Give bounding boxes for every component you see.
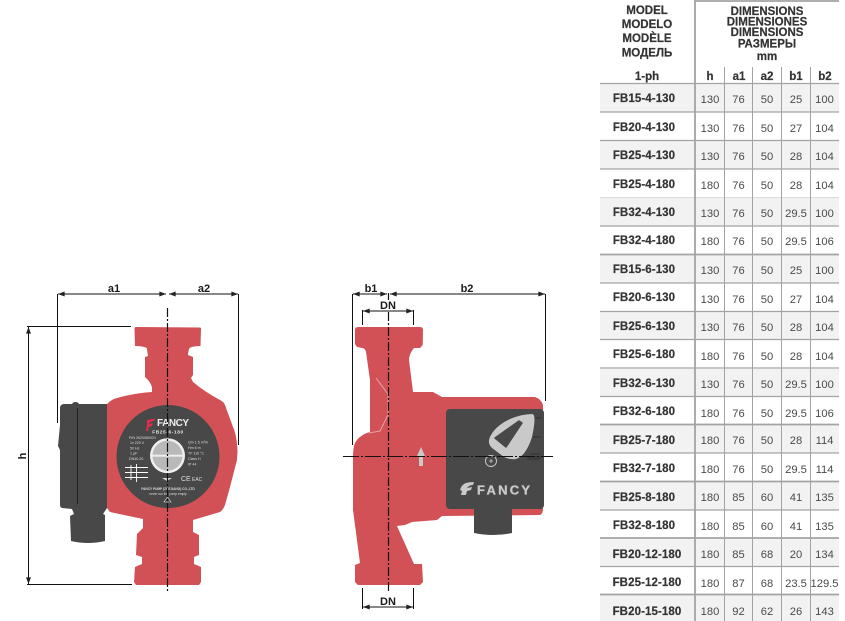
row FB32-4-130: 130 <box>701 208 719 220</box>
manufacturer text: FANCY PUMP (ZHEJIANG) CO.,LTD <box>141 487 195 491</box>
row FB32-6-180: 29.5 <box>785 408 807 420</box>
pump body side <box>353 327 543 585</box>
dimension DN top: DN <box>380 300 396 312</box>
row FB32-8-180: FB32-8-180 <box>613 520 675 532</box>
row FB32-8-180: 85 <box>732 521 745 533</box>
control label disc <box>116 405 220 508</box>
row FB20-4-130: 76 <box>732 123 745 135</box>
row FB32-4-130: 50 <box>761 208 773 220</box>
row FB20-4-130: 104 <box>815 123 834 135</box>
flow arrow <box>417 447 425 466</box>
row FB25-7-180: 114 <box>816 435 833 447</box>
dimension h: h <box>17 452 29 459</box>
row FB25-6-180: 28 <box>790 351 802 363</box>
front view pump <box>58 327 238 585</box>
row shading <box>600 84 839 621</box>
row FB32-4-180: FB32-4-180 <box>613 235 675 247</box>
row FB15-6-130: 76 <box>732 265 745 277</box>
row FB25-12-180: FB25-12-180 <box>613 577 681 589</box>
row FB25-4-180: 180 <box>701 180 719 192</box>
row FB25-4-180: 104 <box>815 180 834 192</box>
column headers: h <box>706 71 714 83</box>
grid lines <box>600 0 839 621</box>
row FB25-6-130: FB25-6-130 <box>613 321 675 333</box>
row FB20-4-130: 130 <box>701 123 719 135</box>
model header <box>622 5 672 83</box>
row FB25-4-180: 76 <box>732 180 745 192</box>
row FB15-6-130: FB15-6-130 <box>613 264 675 276</box>
flow mark <box>162 478 172 481</box>
column headers: b2 <box>818 71 832 83</box>
row FB32-4-180: 29.5 <box>785 236 807 248</box>
dimension h <box>17 326 132 584</box>
row FB25-12-180: 180 <box>701 578 719 590</box>
row FB32-7-180: FB32-7-180 <box>613 463 675 475</box>
recycle mark <box>164 497 171 502</box>
right specs <box>188 440 208 466</box>
row FB25-4-130: 76 <box>732 151 745 163</box>
row FB32-8-180: 60 <box>761 521 773 533</box>
row FB32-4-180: 76 <box>732 236 745 248</box>
row FB25-7-180: 180 <box>701 435 719 447</box>
dimension DN top <box>362 300 414 325</box>
dimension DN bottom: DN <box>380 596 396 608</box>
row FB25-8-180: 180 <box>701 492 719 504</box>
right specs: Class H <box>188 457 201 461</box>
row FB15-6-130: 130 <box>701 265 719 277</box>
certification marks: CE <box>181 476 191 483</box>
row FB15-4-130: 25 <box>790 94 802 106</box>
row FB20-6-130: 27 <box>790 294 802 306</box>
row FB32-8-180: 135 <box>815 521 834 533</box>
row FB25-7-180 <box>613 435 833 447</box>
dimensions header: DIMENSIONS <box>731 6 804 18</box>
row FB25-4-130: 104 <box>815 151 834 163</box>
wing logo <box>489 414 534 459</box>
dimension a1: a1 <box>108 283 120 295</box>
dimension a2: a2 <box>198 283 210 295</box>
rotor cap <box>150 438 185 473</box>
row FB20-6-130: 50 <box>761 294 773 306</box>
row FB25-6-180: 104 <box>815 351 834 363</box>
front view dimensions <box>17 283 238 593</box>
row FB32-6-180: 50 <box>761 408 773 420</box>
row FB32-4-180: 50 <box>761 236 773 248</box>
dimension DN bottom <box>362 588 414 609</box>
row FB20-4-130: 27 <box>790 123 802 135</box>
row FB25-12-180: 23.5 <box>785 578 807 590</box>
logo front: FANCY <box>157 418 189 429</box>
row FB25-12-180: 129.5 <box>810 578 838 590</box>
column headers: a2 <box>761 71 773 83</box>
model name: FB25-6-180 <box>152 430 184 436</box>
row FB20-4-130 <box>613 122 834 135</box>
row FB25-4-180: FB25-4-180 <box>613 179 675 191</box>
dimensions header: DIMENSIONES <box>727 16 808 28</box>
row FB20-12-180: 68 <box>761 549 773 561</box>
row FB25-6-130: 104 <box>815 322 834 334</box>
centre line vertical <box>388 293 390 593</box>
row FB15-4-130: 76 <box>732 94 745 106</box>
left specs: 50 Hz <box>130 446 140 450</box>
row FB20-15-180: 143 <box>815 606 834 618</box>
column headers <box>706 71 832 83</box>
row FB15-4-130: 50 <box>761 94 773 106</box>
row FB32-8-180: 41 <box>790 521 802 533</box>
row FB15-6-130 <box>613 264 834 277</box>
column headers: a1 <box>733 71 746 83</box>
model header: MODELO <box>622 19 672 31</box>
row FB25-12-180: 87 <box>732 578 745 590</box>
right specs: TF 110 °C <box>188 452 205 456</box>
row FB32-6-130: 76 <box>732 379 745 391</box>
centre line horizontal <box>343 456 553 458</box>
left specs: 1 µF <box>130 452 138 456</box>
row FB20-15-180 <box>613 606 834 618</box>
model header: 1-ph <box>635 71 659 83</box>
row FB25-7-180: 76 <box>732 435 745 447</box>
row FB20-6-130: 76 <box>732 294 745 306</box>
dimension b2: b2 <box>461 283 473 295</box>
row FB25-6-180: FB25-6-180 <box>613 349 675 361</box>
row FB25-4-180 <box>613 179 834 192</box>
dimensions table <box>600 0 839 621</box>
row FB20-12-180: FB20-12-180 <box>613 549 681 561</box>
row FB32-7-180: 114 <box>816 464 833 476</box>
row FB20-12-180: 134 <box>815 549 834 561</box>
row FB25-6-180: 180 <box>701 351 719 363</box>
left specs: 1x 220 V <box>130 441 145 445</box>
side view pump <box>353 327 544 585</box>
row FB25-12-180 <box>613 577 838 590</box>
row FB32-7-180 <box>613 463 833 476</box>
row FB25-8-180: 85 <box>732 492 745 504</box>
row FB20-15-180: 180 <box>701 606 719 618</box>
column headers: b1 <box>789 71 803 83</box>
row FB25-6-130: 130 <box>701 322 719 334</box>
row FB32-8-180 <box>613 520 834 533</box>
row FB20-12-180: 85 <box>732 549 745 561</box>
left specs: P/N 2620060021 <box>129 436 156 440</box>
row FB32-4-130: 29.5 <box>785 208 807 220</box>
row FB20-4-130: 50 <box>761 123 773 135</box>
row FB25-4-130: 130 <box>701 151 719 163</box>
row FB32-6-130: 50 <box>761 379 773 391</box>
row FB25-6-130 <box>613 321 834 334</box>
right specs: IP 44 <box>188 462 196 466</box>
row FB32-7-180: 180 <box>701 464 719 476</box>
row FB32-6-180 <box>613 406 834 420</box>
row FB32-7-180: 50 <box>761 464 773 476</box>
row FB32-6-130 <box>613 378 834 391</box>
row FB20-6-130: 130 <box>701 294 719 306</box>
control label disc: never run the pump empty <box>149 492 187 496</box>
row FB32-6-130: 100 <box>815 379 834 391</box>
row FB25-6-180: 76 <box>732 351 745 363</box>
row FB25-7-180: FB25-7-180 <box>613 435 675 447</box>
dimension b1: b1 <box>365 283 377 295</box>
row FB20-12-180 <box>613 549 834 561</box>
right specs: Hm 6 m <box>188 446 201 450</box>
motor centre line <box>76 408 78 504</box>
row FB20-6-130: 104 <box>815 294 834 306</box>
pump body front <box>107 327 238 585</box>
row FB32-6-130: 130 <box>701 379 719 391</box>
left specs: DN40-20 <box>129 457 143 461</box>
row FB32-4-130: FB32-4-130 <box>613 207 675 219</box>
row FB25-6-130: 28 <box>790 322 802 334</box>
brand logo: FANCY <box>477 482 530 498</box>
row FB20-12-180: 20 <box>790 549 802 561</box>
row FB32-4-130: 100 <box>815 208 834 220</box>
row FB32-8-180: 180 <box>701 521 719 533</box>
side view dimensions <box>343 283 553 609</box>
left specs <box>129 436 156 461</box>
row FB25-6-180 <box>613 349 834 363</box>
row FB32-6-180: 76 <box>732 408 745 420</box>
row FB32-6-130: 29.5 <box>785 379 807 391</box>
row FB32-4-180 <box>613 235 834 248</box>
row FB20-6-130: FB20-6-130 <box>613 292 675 304</box>
row FB25-4-130 <box>613 150 834 163</box>
row FB25-7-180: 50 <box>761 435 773 447</box>
screw <box>486 456 496 466</box>
dimensions header: DIMENSIONS <box>731 27 804 39</box>
row FB15-6-130: 25 <box>790 265 802 277</box>
casing seam <box>369 378 388 433</box>
row FB15-6-130: 50 <box>761 265 773 277</box>
terminal stem <box>474 509 512 535</box>
row FB25-4-180: 28 <box>790 180 802 192</box>
row FB20-12-180: 180 <box>701 549 719 561</box>
row FB15-6-130: 100 <box>815 265 834 277</box>
row FB15-4-130: 100 <box>815 94 834 106</box>
row FB20-15-180: 62 <box>761 606 773 618</box>
row FB20-15-180: FB20-15-180 <box>613 606 681 618</box>
power table <box>125 464 148 482</box>
row FB15-4-130: FB15-4-130 <box>613 93 675 105</box>
row FB25-6-180: 50 <box>761 351 773 363</box>
model header: МОДЕЛЬ <box>622 48 672 60</box>
row FB25-7-180: 28 <box>790 435 802 447</box>
row FB32-4-130: 76 <box>732 208 745 220</box>
row FB32-7-180: 29.5 <box>785 464 807 476</box>
row FB25-6-130: 50 <box>761 322 773 334</box>
row FB20-15-180: 92 <box>732 606 745 618</box>
tick marks <box>527 418 541 459</box>
control box <box>446 409 544 509</box>
dimension a1 <box>58 283 166 423</box>
centre line front <box>166 308 168 593</box>
row FB32-6-130: FB32-6-130 <box>613 378 675 390</box>
row FB15-4-130 <box>613 93 834 106</box>
row FB20-4-130: FB20-4-130 <box>613 122 675 134</box>
row FB25-4-130: 50 <box>761 151 773 163</box>
row FB25-6-130: 76 <box>732 322 745 334</box>
row FB25-8-180 <box>613 492 834 504</box>
row FB32-4-180: 180 <box>701 236 719 248</box>
row FB25-4-130: 28 <box>790 151 802 163</box>
row FB32-4-130 <box>613 207 834 220</box>
control label disc: EAC <box>192 477 203 483</box>
row FB25-4-130: FB25-4-130 <box>613 150 675 162</box>
model header: MODEL <box>626 5 668 17</box>
motor housing <box>58 402 107 543</box>
row FB25-8-180: 41 <box>790 492 802 504</box>
row FB25-12-180: 68 <box>761 578 773 590</box>
dimensions header: mm <box>757 51 777 63</box>
row FB32-6-180: 180 <box>701 408 719 420</box>
row FB32-7-180: 76 <box>732 464 745 476</box>
dimensions header: РАЗМЕРЫ <box>738 38 796 50</box>
row FB32-6-180: 106 <box>815 408 834 420</box>
row FB15-4-130: 130 <box>701 94 719 106</box>
dimensions header <box>727 6 808 63</box>
model header: MODÈLE <box>622 32 672 45</box>
row FB32-4-180: 106 <box>815 236 834 248</box>
row FB25-8-180: 60 <box>761 492 773 504</box>
row FB20-15-180: 26 <box>790 606 802 618</box>
row FB25-8-180: FB25-8-180 <box>613 492 675 504</box>
row FB25-4-180: 50 <box>761 180 773 192</box>
row FB32-6-180: FB32-6-180 <box>613 406 675 418</box>
row FB20-6-130 <box>613 292 834 306</box>
row FB25-8-180: 135 <box>815 492 834 504</box>
right specs: Qm 1.5 m³/h <box>188 440 208 444</box>
